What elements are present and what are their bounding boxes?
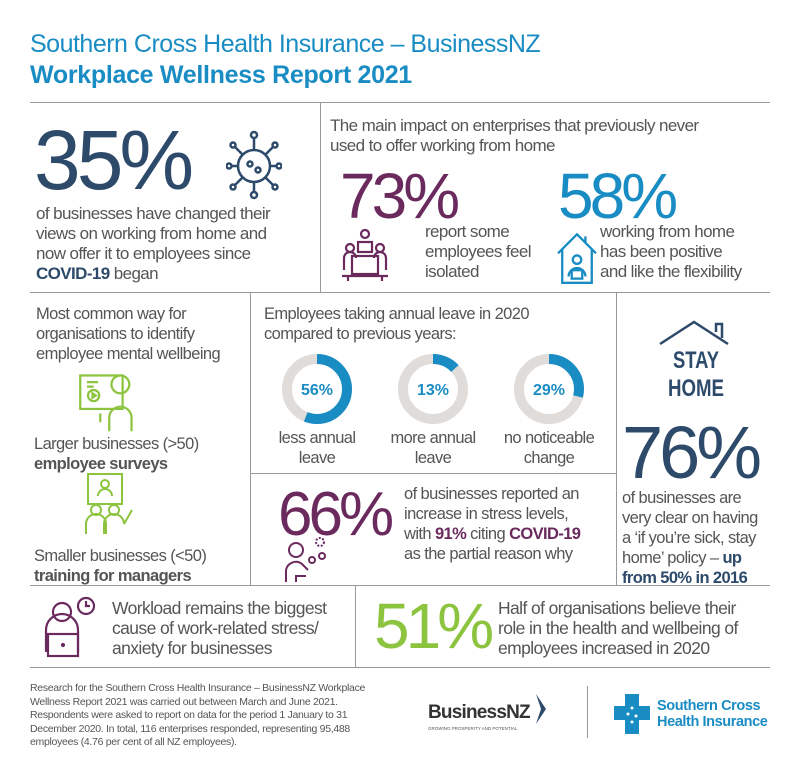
title bbox=[30, 30, 540, 89]
footer note: Wellness Report 2021 was carried out between March and June 2021. bbox=[30, 696, 338, 708]
logo: BusinessNZ: GROWING PROSPERITY AND POTENTIAL bbox=[428, 726, 517, 731]
donut chart: 29%: 29% bbox=[533, 382, 565, 399]
icon: stay home: STAY bbox=[673, 347, 719, 374]
panel: 51% bbox=[374, 590, 738, 662]
icon: person with laptop and clock bbox=[44, 596, 96, 658]
text: 73%: employees feel bbox=[425, 242, 531, 261]
text: 51%: Half of organisations believe their bbox=[498, 598, 736, 618]
heading bbox=[36, 305, 220, 363]
text: 76%: from 50% in 2016 bbox=[622, 569, 747, 587]
text: 58%: has been positive bbox=[600, 242, 722, 261]
logo: Southern Cross bbox=[614, 694, 768, 734]
text: workload bbox=[112, 598, 327, 658]
footer note: Research for the Southern Cross Health Insurance – BusinessNZ Workplace bbox=[30, 682, 365, 694]
stat 35%: 35% bbox=[34, 113, 190, 207]
footer note: Respondents were asked to report on data for the period 1 January to 31 bbox=[30, 709, 347, 721]
text: 73%: report some bbox=[425, 222, 509, 241]
stat 76%: 76% bbox=[622, 411, 758, 494]
icon: video survey bbox=[79, 374, 133, 432]
heading: employee mental wellbeing bbox=[36, 345, 220, 363]
donut chart: 13% bbox=[390, 354, 476, 467]
logo: Southern Cross: Health Insurance bbox=[657, 714, 767, 730]
icon: stay home bbox=[659, 320, 729, 400]
text: 58%: working from home bbox=[600, 222, 734, 241]
heading: organisations to identify bbox=[36, 325, 194, 343]
panel: mental wellbeing identification bbox=[34, 305, 220, 585]
donut chart: 56%: leave bbox=[299, 449, 335, 467]
text: 76%: very clear on having bbox=[622, 509, 758, 527]
text: 66%: as the partial reason why bbox=[404, 545, 572, 563]
donut chart: 56%: 56% bbox=[301, 382, 333, 399]
text: 66%: of businesses reported an bbox=[404, 485, 579, 503]
panel: stay home 76% bbox=[622, 320, 760, 587]
text: 66%: increase in stress levels, bbox=[404, 505, 568, 523]
text: 58% bbox=[600, 222, 742, 281]
text: smaller businesses: Smaller businesses (<50) bbox=[34, 547, 206, 565]
heading bbox=[264, 305, 529, 343]
donut chart: 13%: 13% bbox=[417, 382, 449, 399]
panel: workload bbox=[44, 596, 327, 658]
text: smaller businesses bbox=[34, 547, 206, 585]
logo: Southern Cross: Southern Cross bbox=[657, 698, 760, 714]
text: 73% bbox=[425, 222, 531, 281]
heading: Most common way for bbox=[36, 305, 186, 323]
text: smaller businesses: training for managers bbox=[34, 567, 191, 585]
title: Southern Cross Health Insurance – BusinessNZ bbox=[30, 30, 540, 58]
icon: stressed person bbox=[285, 537, 326, 582]
text: 66%: with 91% citing COVID-19 bbox=[404, 525, 580, 543]
text: 35% description: COVID-19 began bbox=[36, 264, 158, 283]
heading: compared to previous years: bbox=[264, 325, 456, 343]
text: 35% description: views on working from home and bbox=[36, 224, 267, 243]
logo: BusinessNZ bbox=[428, 694, 546, 731]
stat 66%: 66% bbox=[278, 480, 390, 549]
donut chart: 29%: change bbox=[524, 449, 574, 467]
donut chart: 29% bbox=[504, 354, 594, 467]
text: 51%: role in the health and wellbeing of bbox=[498, 618, 738, 638]
icon: training bbox=[85, 473, 133, 534]
text: larger businesses: Larger businesses (>50) bbox=[34, 435, 199, 453]
icon: meeting bbox=[342, 228, 388, 281]
text: workload: Workload remains the biggest bbox=[112, 598, 326, 618]
donut chart: 13%: leave bbox=[415, 449, 451, 467]
text: larger businesses bbox=[34, 435, 199, 473]
text: 73%: isolated bbox=[425, 262, 479, 281]
donut chart: 13%: more annual bbox=[390, 429, 476, 447]
icon: virus bbox=[226, 130, 282, 200]
panel: annual leave bbox=[264, 305, 594, 467]
heading: used to offer working from home bbox=[330, 136, 555, 155]
text: workload: anxiety for businesses bbox=[112, 638, 272, 658]
text: 51%: employees increased in 2020 bbox=[498, 638, 709, 658]
text: 76%: of businesses are bbox=[622, 489, 741, 507]
text: workload: cause of work-related stress/ bbox=[112, 618, 318, 638]
stat 73%: 73% bbox=[340, 160, 456, 232]
text: 76% bbox=[622, 489, 758, 587]
text: 35% description bbox=[36, 204, 270, 283]
title: Workplace Wellness Report 2021 bbox=[30, 61, 412, 89]
stat 51%: 51% bbox=[374, 590, 490, 662]
panel: 35% bbox=[34, 113, 282, 283]
text: 76%: a ‘if you’re sick, stay bbox=[622, 529, 756, 547]
footer note: employees (4.76 per cent of all NZ employees). bbox=[30, 736, 237, 748]
text: 35% description: of businesses have changed their bbox=[36, 204, 270, 223]
icon: home worker bbox=[557, 232, 597, 284]
footer note bbox=[30, 682, 365, 748]
text: larger businesses: employee surveys bbox=[34, 455, 168, 473]
panel: stress 66% bbox=[278, 480, 580, 582]
donut chart: 56% bbox=[279, 354, 355, 467]
panel: working from home impact bbox=[330, 116, 742, 284]
text: 35% description: now offer it to employees since bbox=[36, 244, 250, 263]
text: 58%: and like the flexibility bbox=[600, 262, 742, 281]
text: 66% bbox=[404, 485, 580, 563]
heading bbox=[330, 116, 699, 155]
donut chart: 29%: no noticeable bbox=[504, 429, 594, 447]
heading: The main impact on enterprises that previously never bbox=[330, 116, 698, 135]
stat 58%: 58% bbox=[558, 160, 674, 232]
heading: Employees taking annual leave in 2020 bbox=[264, 305, 529, 323]
text: 76%: home’ policy – up bbox=[622, 549, 741, 567]
footer note: December 2020. In total, 116 enterprises responded, representing 95,488 bbox=[30, 722, 350, 734]
logo: BusinessNZ: BusinessNZ bbox=[428, 702, 530, 723]
donut chart: 56%: less annual bbox=[279, 429, 355, 447]
text: 51% bbox=[498, 598, 738, 658]
